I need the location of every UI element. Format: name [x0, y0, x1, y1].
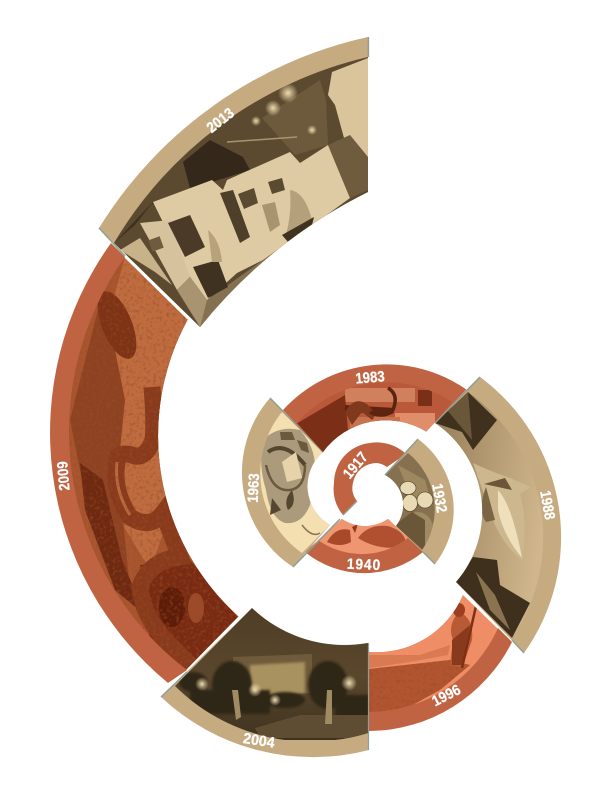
year label: 1963: 1963 [244, 473, 262, 503]
segment: 1940 [306, 519, 423, 574]
segment: 1983 [283, 364, 467, 455]
segment: 2004 [161, 600, 370, 757]
year label: 1988: 1988 [537, 489, 559, 521]
photo: snake [69, 258, 239, 670]
year label: 1917: 1917 [339, 448, 371, 482]
photo: shark over reef [435, 392, 543, 638]
segment: 1988 [430, 377, 561, 653]
segment: 1932 [380, 439, 454, 564]
photo: engraving of fisherman [369, 595, 498, 712]
year label: 2004: 2004 [242, 731, 277, 752]
year label: 1932: 1932 [429, 482, 451, 514]
photo: artifacts [318, 519, 408, 554]
photo: woven basket [260, 412, 330, 553]
segment: 2009 [50, 243, 250, 683]
year label: 1940: 1940 [346, 556, 381, 574]
segment: 1917 [334, 442, 406, 515]
photo: museum at night [170, 600, 370, 740]
photo: bird eggs in nest [385, 453, 435, 550]
year label: 1983: 1983 [355, 367, 385, 387]
year label: 1996: 1996 [429, 682, 464, 710]
segment: 1963 [242, 398, 340, 567]
segment: 2013 [99, 37, 370, 330]
year label: 2013: 2013 [204, 105, 238, 137]
year label: 2009: 2009 [53, 461, 73, 491]
photo: exhibition hall [100, 50, 370, 330]
photo: museum exhibit with mammoth [297, 382, 452, 452]
segment: 1996 [365, 590, 512, 731]
